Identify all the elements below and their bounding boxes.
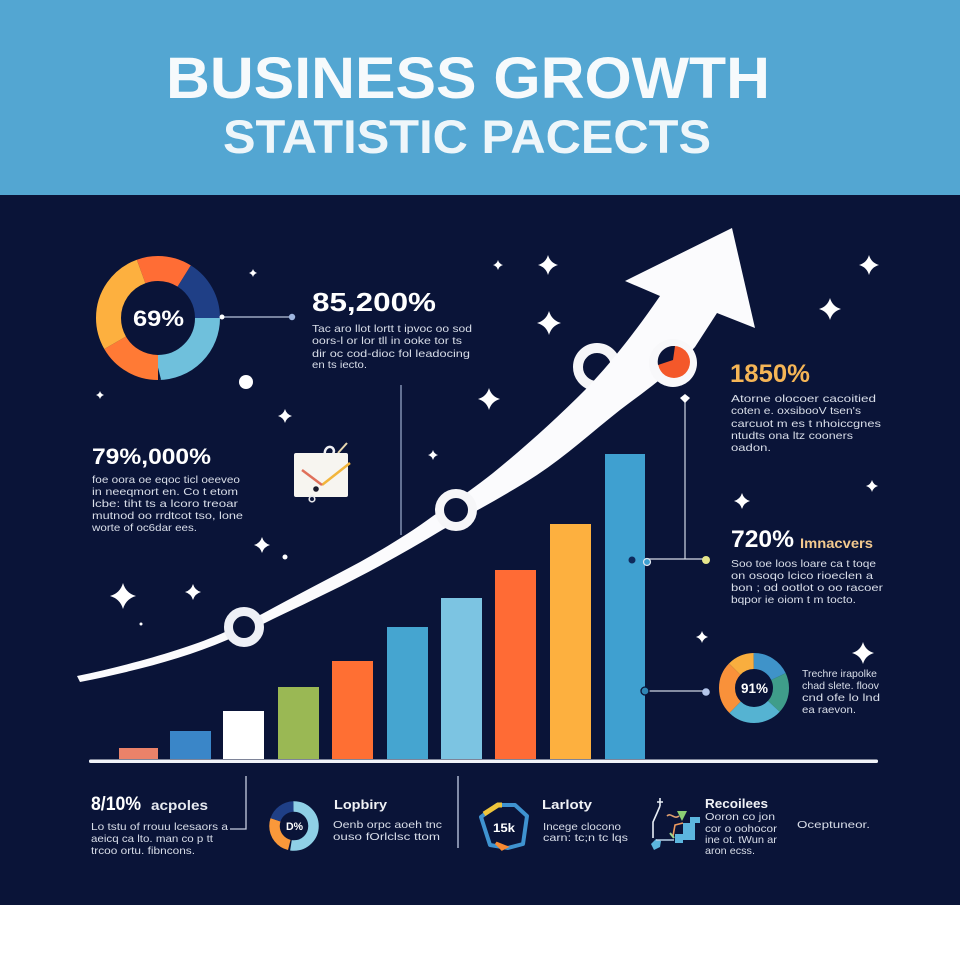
bottom text: Recoilees: cor o oohocor bbox=[705, 823, 778, 835]
stat block: 1850%: 1850% bbox=[730, 360, 810, 388]
donut chart: 69% bbox=[108, 268, 208, 368]
star field bbox=[96, 255, 879, 664]
stat block: 79%,000%: 79%,000% bbox=[92, 444, 211, 469]
stat block: 79%,000%: mutnod oo rrdtcot tso, lone bbox=[92, 510, 243, 522]
icon: hexagon 15k bbox=[481, 805, 527, 849]
donut chart: 69%: 69% bbox=[133, 306, 184, 331]
text: 91% description bbox=[802, 668, 880, 716]
stat block: 79%,000%: worte of oc6dar ees. bbox=[91, 522, 197, 534]
bottom text: Oceptuneor: Oceptuneor. bbox=[797, 819, 870, 831]
bottom text: Lopbiry bbox=[333, 797, 442, 843]
stat block: 79%,000% bbox=[91, 444, 243, 534]
bottom text: Recoilees bbox=[705, 796, 778, 857]
bottom stat: 8/10% acpoles: trcoo ortu. fibncons. bbox=[91, 845, 195, 857]
stat block: 85,200%: 85,200% bbox=[312, 287, 436, 317]
donut chart: bottom bbox=[274, 806, 314, 846]
growth arrow bbox=[77, 228, 755, 682]
bottom stat: 8/10% acpoles: 8/10% bbox=[91, 794, 141, 815]
ring marker middle bbox=[440, 494, 472, 526]
bottom stat: 8/10% acpoles bbox=[91, 794, 228, 857]
stat block: 79%,000%: lcbe: tiht ts a lcoro treoar bbox=[92, 498, 239, 510]
connector: donut to 85,200% bbox=[220, 314, 295, 320]
text: 91% description: chad slete. floov bbox=[802, 680, 880, 692]
bottom text: Recoilees: ine ot. tWun ar bbox=[705, 834, 778, 846]
bottom text: Recoilees: Ooron co jon bbox=[705, 811, 775, 823]
bracket line bbox=[230, 776, 246, 829]
stat block: 1850%: ntudts ona ltz cooners bbox=[731, 430, 853, 442]
bottom text: Larloty: carn: tc;n tc lqs bbox=[543, 832, 628, 844]
title: BUSINESS GROWTH bbox=[166, 46, 770, 111]
icon: checklist card bbox=[294, 443, 350, 502]
stat block: 85,200%: dir oc cod-dioc fol leadocing bbox=[312, 348, 470, 360]
connector: arrow to 720% bbox=[628, 394, 710, 566]
stat block: 1850%: Atorne olocoer cacoitied bbox=[731, 393, 876, 405]
vertical divider bbox=[457, 776, 459, 848]
connector: bar to 91% donut bbox=[641, 687, 710, 696]
stat block: 79%,000%: foe oora oe eqoc ticl oeeveo bbox=[92, 474, 240, 486]
stat block: 85,200% bbox=[312, 287, 472, 371]
header band bbox=[0, 0, 960, 195]
stat block: 1850%: oadon. bbox=[731, 442, 771, 454]
donut chart: bottom: D% bbox=[286, 821, 303, 833]
stat block: 720% Imnacvers: on osoqo lcico rioeclen a bbox=[731, 570, 873, 582]
bottom stat: 8/10% acpoles: acpoles bbox=[151, 797, 208, 813]
stat block: 85,200%: oors-l or lor tll in ooke tor ts bbox=[312, 335, 462, 347]
vertical guide line bbox=[400, 385, 402, 535]
stat block: 85,200%: Tac aro llot lortt t ipvoc oo sod bbox=[312, 323, 472, 335]
icon: process flow bbox=[651, 798, 700, 850]
bottom text: Recoilees: aron ecss. bbox=[705, 845, 755, 857]
text: 91% description: Trechre irapolke bbox=[802, 668, 877, 680]
stat block: 720% Imnacvers: Soo toe loos loare ca t toqe bbox=[731, 558, 876, 570]
stat block: 720% Imnacvers bbox=[731, 526, 884, 606]
stat block: 720% Imnacvers: bqpor ie oiom t m tocto. bbox=[731, 594, 856, 606]
bottom stat: 8/10% acpoles: aeicq ca lto. man co p tt bbox=[91, 833, 213, 845]
stat block: 1850%: carcuot m es t nhoiccgnes bbox=[731, 418, 881, 430]
text: 91% description: ea raevon. bbox=[802, 704, 856, 716]
icon: hexagon 15k: 15k bbox=[493, 821, 515, 835]
stat block: 720% Imnacvers: 720% bbox=[731, 526, 794, 553]
bottom text: Larloty: Larloty bbox=[542, 797, 593, 812]
stat block: 1850%: coten e. oxsibooV tsen's bbox=[731, 405, 861, 417]
stat block: 1850% bbox=[730, 360, 881, 454]
ring marker with pie bbox=[649, 339, 697, 387]
subtitle: STATISTIC PACECTS bbox=[223, 110, 711, 163]
ring marker behind arrow bbox=[578, 348, 616, 386]
bottom text: Lopbiry: Oenb orpc aoeh tnc bbox=[333, 819, 442, 831]
donut chart: 91% bbox=[727, 661, 781, 715]
bottom text: Lopbiry: ouso fOrlclsc ttom bbox=[333, 831, 440, 843]
stat block: 720% Imnacvers: bon ; od ootlot o oo racoer bbox=[731, 582, 884, 594]
ring marker low bbox=[228, 612, 260, 642]
stat block: 85,200%: en ts iecto. bbox=[312, 359, 367, 371]
bottom text: Recoilees: Recoilees bbox=[705, 796, 768, 811]
stat block: 720% Imnacvers: Imnacvers bbox=[800, 535, 873, 551]
donut chart: 91%: 91% bbox=[741, 680, 769, 696]
dark main panel bbox=[0, 195, 960, 905]
bottom text: Larloty: Incege clocono bbox=[543, 821, 621, 833]
stat block: 79%,000%: in neeqmort en. Co t etom bbox=[92, 486, 238, 498]
bottom stat: 8/10% acpoles: Lo tstu of rrouu lcesaors a bbox=[91, 821, 228, 833]
bottom text: Larloty bbox=[542, 797, 628, 844]
bottom text: Lopbiry: Lopbiry bbox=[334, 797, 388, 812]
bar chart bbox=[89, 454, 878, 763]
text: 91% description: cnd ofe lo lnd bbox=[802, 692, 880, 704]
